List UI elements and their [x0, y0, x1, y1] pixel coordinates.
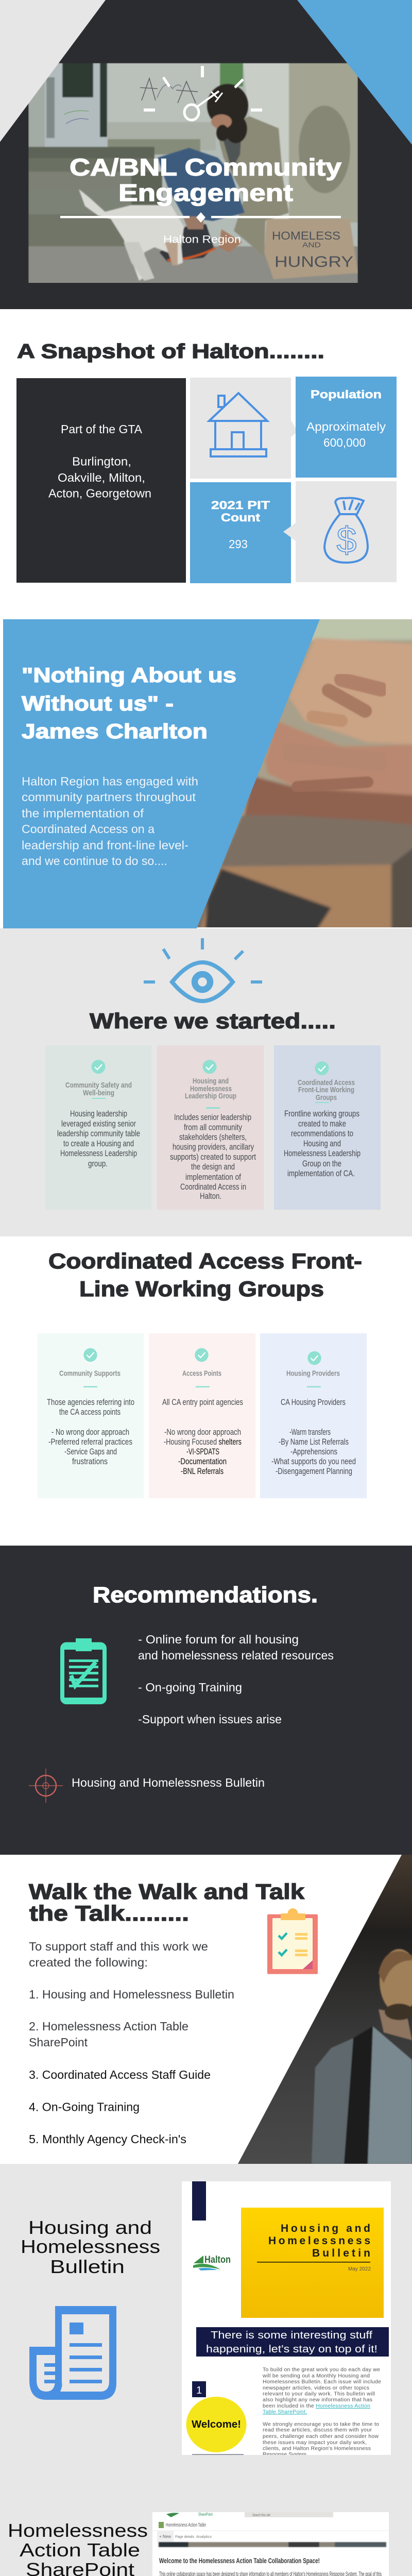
- card: leadership group: stakeholders (shelters,: [179, 1132, 247, 1142]
- sharepoint toolbar: Homelessness Action Table: [166, 2522, 206, 2528]
- card: access points: -BNL Referrals: [181, 1467, 224, 1476]
- sign lettering: HOMELESS: [272, 229, 340, 242]
- recommendation list: and homelessness related resources: [138, 1649, 334, 1662]
- card: front-line working groups: Group on the: [302, 1159, 341, 1168]
- icon: money bag: [324, 498, 368, 563]
- card: housing providers: -Apprehensions: [290, 1447, 337, 1456]
- heading: [8, 2520, 148, 2576]
- stat: population: [291, 377, 397, 478]
- panel: hero: [0, 0, 412, 309]
- bulletin body text: newspaper articles, videos or other topics: [263, 2385, 369, 2391]
- card: community safety: leveraged existing senior: [61, 1119, 136, 1128]
- card: front-line working groups: [274, 1045, 381, 1210]
- card: community safety: Housing leadership: [70, 1109, 127, 1118]
- document: sharepoint screenshot: [152, 2512, 389, 2576]
- decorative blue corner: [297, 0, 412, 145]
- stat: population: Approximately: [306, 420, 386, 433]
- heading: [48, 1249, 362, 1301]
- bulletin body text: Table SharePoint.: [263, 2409, 307, 2415]
- panel: house icon box: [190, 378, 291, 479]
- recommendation list: - Online forum for all housing: [138, 1633, 299, 1646]
- heading: Recommendations.: [93, 1583, 318, 1607]
- heading: Walk the Walk and Talk: [29, 1879, 305, 1904]
- card: front-line working groups: Coordinated Access: [298, 1078, 355, 1087]
- card: front-line working groups: recommendations to: [291, 1129, 353, 1139]
- logo: Halton: [193, 2255, 231, 2270]
- sharepoint toolbar: Search this site: [252, 2514, 270, 2517]
- card: leadership group: the design and: [191, 1162, 235, 1172]
- panel: coordinated access front-line working groups: [37, 1249, 367, 1498]
- card: access points: -Documentation: [178, 1457, 227, 1466]
- card: community supports: frustrations: [72, 1457, 108, 1466]
- sign lettering: AND: [302, 241, 321, 249]
- dark box: geography: Acton, Georgetown: [48, 486, 151, 500]
- quote body: the implementation of: [22, 807, 144, 820]
- icon: eye with rays: [144, 938, 262, 1001]
- stat: PIT count: [190, 482, 291, 583]
- icon: target: [29, 1769, 63, 1803]
- welcome badge: Welcome!: [192, 2419, 241, 2430]
- heading: Housing and: [28, 2217, 152, 2238]
- card: front-line working groups: Homelessness Leadership: [284, 1149, 360, 1158]
- panel: snapshot of Halton: [16, 341, 397, 583]
- numbered list: 2. Homelessness Action Table: [29, 2020, 188, 2033]
- recommendation list: -Support when issues arise: [138, 1713, 282, 1726]
- icon: checklist clipboard: [267, 1908, 318, 1974]
- quote heading: "Nothing About us: [22, 664, 236, 687]
- panel: homelessness action table sharepoint: [0, 2473, 412, 2576]
- quote heading: James Charlton: [22, 720, 208, 743]
- blue diagonal panel: [3, 619, 320, 928]
- card: community supports: Those agencies referring into: [47, 1398, 134, 1407]
- card: leadership group: Includes senior leadership: [174, 1113, 251, 1122]
- hair and face: [206, 83, 249, 120]
- heading: Homelessness: [8, 2520, 148, 2541]
- bulletin body text: relevant to your daily work. This bulletin will: [263, 2391, 375, 2397]
- quote heading: [22, 664, 236, 743]
- card: leadership group: Homelessness: [190, 1084, 232, 1093]
- welcome heading: Welcome to the Homelessness Action Table Collaboration Space!: [159, 2556, 320, 2565]
- heading: Line Working Groups: [79, 1277, 324, 1301]
- card: access points: Access Points: [182, 1369, 221, 1378]
- number badge: 1: [196, 2385, 202, 2396]
- card: access points: All CA entry point agencies: [162, 1398, 243, 1407]
- bulletin body text: will be sending out a Monthly Housing and: [262, 2373, 370, 2379]
- photo: man looking up: [232, 1855, 412, 2164]
- intro text: [29, 1940, 208, 1969]
- card: community safety: to create a Housing and: [63, 1139, 134, 1148]
- dark box: geography: Burlington,: [72, 454, 131, 468]
- sign lettering: HUNGRY: [274, 253, 353, 270]
- card: housing providers: -Warm transfers: [289, 1428, 331, 1437]
- quote body: [22, 775, 198, 868]
- card: leadership group: housing providers, ancillary: [173, 1143, 254, 1152]
- quote heading: Without us" -: [22, 692, 174, 715]
- card: community safety: leadership community table: [57, 1129, 140, 1139]
- card: community safety: group.: [88, 1159, 108, 1168]
- card: housing providers: [260, 1333, 367, 1498]
- banner: There is some interesting stuff: [211, 2330, 373, 2341]
- jeans: [158, 148, 245, 221]
- sharepoint toolbar: SharePoint: [198, 2512, 213, 2517]
- bulletin body text: also highlight any new information that has: [263, 2397, 372, 2403]
- heading: Bulletin: [50, 2256, 125, 2277]
- heading: Action Table: [20, 2539, 140, 2561]
- stat: population: Population: [311, 388, 382, 401]
- icon: house: [209, 393, 267, 456]
- logo: Halton: Halton: [204, 2255, 231, 2265]
- card: front-line working groups: Front-Line Working: [298, 1086, 354, 1094]
- card: front-line working groups: Frontline working groups: [284, 1109, 359, 1118]
- card: front-line working groups: created to make: [298, 1119, 346, 1128]
- card: community safety: Homelessness Leadership: [60, 1149, 137, 1158]
- title: [70, 154, 341, 206]
- card: community supports: the CA access points: [59, 1408, 121, 1417]
- card: housing providers: -By Name List Referrals: [279, 1437, 349, 1447]
- quote body: Coordinated Access on a: [22, 822, 154, 836]
- card: access points: -Housing Focused shelters: [164, 1437, 242, 1447]
- welcome badge: [186, 2397, 246, 2452]
- graffiti: [64, 78, 198, 124]
- icon: key with rays: [144, 66, 262, 120]
- panel: walk the walk: [28, 1855, 412, 2164]
- sign: [264, 219, 358, 279]
- photo: stacked hands: [197, 619, 412, 927]
- numbered list: 1. Housing and Homelessness Bulletin: [29, 1988, 234, 2001]
- bulletin cover: [241, 2208, 384, 2318]
- card: community supports: [37, 1333, 144, 1498]
- stat: PIT count: Count: [221, 511, 261, 524]
- callout: bulletin: Housing and Homelessness Bulletin: [72, 1776, 265, 1789]
- bulletin body text: been included in the Homelessness Action: [263, 2403, 370, 2409]
- panel: James Charlton quote: [3, 619, 412, 928]
- icon: newspaper: [29, 2306, 116, 2400]
- icon: clipboard checklist: [60, 1638, 107, 1704]
- stat: PIT count: 293: [229, 537, 248, 551]
- bulletin cover: May 2022: [348, 2266, 371, 2272]
- card: leadership group: from all community: [184, 1123, 243, 1132]
- panel: where we started: [0, 928, 412, 1236]
- card: leadership group: [157, 1045, 264, 1210]
- title: Engagement: [118, 179, 293, 206]
- card: leadership group: Leadership Group: [185, 1092, 236, 1100]
- bulletin body text: these issues may impact your daily work,: [263, 2439, 367, 2446]
- bulletin body text: clients, and Halton Region's Homelessness: [263, 2446, 371, 2452]
- sharepoint toolbar: [152, 2512, 389, 2542]
- heading: A Snapshot of Halton........: [17, 341, 324, 363]
- bulletin body text: read these articles, discuss them with your: [263, 2427, 372, 2433]
- intro text: To support staff and this work we: [29, 1940, 208, 1953]
- panel: money bag box: [283, 481, 397, 582]
- stat: PIT count: 2021 PIT: [211, 499, 270, 512]
- sharepoint toolbar: Page details: [175, 2535, 194, 2539]
- card: community supports: - No wrong door approach: [52, 1428, 129, 1437]
- intro text: created the following:: [29, 1956, 148, 1969]
- card: leadership group: Coordinated Access in: [180, 1182, 246, 1192]
- heading: Coordinated Access Front-: [48, 1249, 362, 1273]
- card: housing providers: CA Housing Providers: [281, 1398, 346, 1407]
- subtitle: Halton Region: [163, 234, 241, 245]
- card: access points: [149, 1333, 255, 1498]
- dark box: geography: [16, 378, 186, 583]
- hero photo: homeless man with dog and sign: [28, 63, 358, 284]
- numbered list: 4. On-Going Training: [29, 2100, 140, 2113]
- card: access points: -VI-SPDATS: [186, 1447, 219, 1456]
- heading: Where we started.....: [90, 1009, 336, 1033]
- stat: population: 600,000: [323, 436, 366, 449]
- dark box: geography: Oakville, Milton,: [58, 471, 145, 484]
- recommendation list: - On-going Training: [138, 1681, 242, 1694]
- dark box: geography: Part of the GTA: [61, 422, 143, 436]
- dog: [79, 189, 184, 281]
- numbered list: 5. Monthly Agency Check-in's: [29, 2132, 186, 2146]
- quote body: community partners throughout: [22, 790, 196, 804]
- card: housing providers: Housing Providers: [286, 1369, 340, 1378]
- card: leadership group: Housing and: [193, 1077, 229, 1086]
- bulletin body text: peers, challenge each other and consider how: [263, 2433, 379, 2439]
- card: community safety: Well-being: [83, 1089, 114, 1097]
- card: community supports: Community Supports: [59, 1369, 121, 1378]
- card: community supports: -Preferred referral practices: [48, 1437, 132, 1447]
- card: community safety: [45, 1045, 151, 1210]
- quote body: Halton Region has engaged with: [22, 775, 198, 788]
- quote body: and we continue to do so....: [22, 854, 167, 868]
- card: access points: -No wrong door approach: [164, 1428, 241, 1437]
- banner: [196, 2327, 389, 2357]
- bulletin body text: [262, 2367, 381, 2458]
- shoes: [160, 224, 214, 262]
- number badge: [192, 2381, 206, 2397]
- recommendation list: [138, 1633, 334, 1726]
- heading: Homelessness: [21, 2236, 160, 2257]
- card: leadership group: implementation of: [185, 1173, 241, 1182]
- card: community safety: Community Safety and: [65, 1081, 132, 1090]
- title divider: [60, 212, 341, 223]
- bulletin cover: Homelessness: [268, 2235, 370, 2247]
- card: housing providers: -Disengagement Planning: [276, 1467, 352, 1476]
- card: leadership group: supports) created to support: [170, 1153, 256, 1162]
- numbered list: SharePoint: [29, 2036, 88, 2049]
- bulletin body text: Response System: [263, 2451, 306, 2458]
- card: front-line working groups: Groups: [316, 1093, 337, 1102]
- bulletin cover: Bulletin: [312, 2247, 370, 2259]
- card: front-line working groups: implementation of CA.: [287, 1169, 355, 1178]
- banner strip: [159, 2542, 386, 2547]
- sharepoint toolbar: + New: [159, 2534, 171, 2539]
- heading: the Talk.........: [29, 1901, 189, 1925]
- jacket: [215, 116, 289, 257]
- document: bulletin preview: [182, 2181, 391, 2458]
- bulletin cover: Housing and: [281, 2223, 370, 2234]
- numbered list: [29, 1988, 234, 2146]
- bulletin body text: Homelessness Bulletin. Each issue will include: [263, 2379, 381, 2385]
- quote body: leadership and front-line level-: [22, 839, 188, 852]
- sharepoint toolbar: Analytics: [196, 2535, 212, 2539]
- numbered list: 3. Coordinated Access Staff Guide: [29, 2068, 211, 2081]
- card: housing providers: -What supports do you need: [271, 1457, 356, 1466]
- bulletin body text: To build on the great work you do each day we: [263, 2367, 380, 2373]
- card: community supports: -Service Gaps and: [64, 1447, 117, 1456]
- panel: housing and homelessness bulletin: [0, 2164, 412, 2473]
- title: CA/BNL Community: [70, 154, 341, 181]
- bulletin body text: We strongly encourage you to take the time to: [263, 2421, 379, 2428]
- card: leadership group: Halton.: [200, 1192, 221, 1201]
- heading: [29, 1879, 305, 1925]
- panel: recommendations: [0, 1546, 412, 1855]
- icon: money bag: $: [337, 520, 356, 560]
- decorative grey corner: [0, 0, 106, 142]
- card: front-line working groups: Housing and: [303, 1139, 341, 1148]
- banner: happening, let's stay on top of it!: [206, 2344, 377, 2355]
- heading: [21, 2217, 160, 2277]
- sign lettering: [273, 232, 353, 267]
